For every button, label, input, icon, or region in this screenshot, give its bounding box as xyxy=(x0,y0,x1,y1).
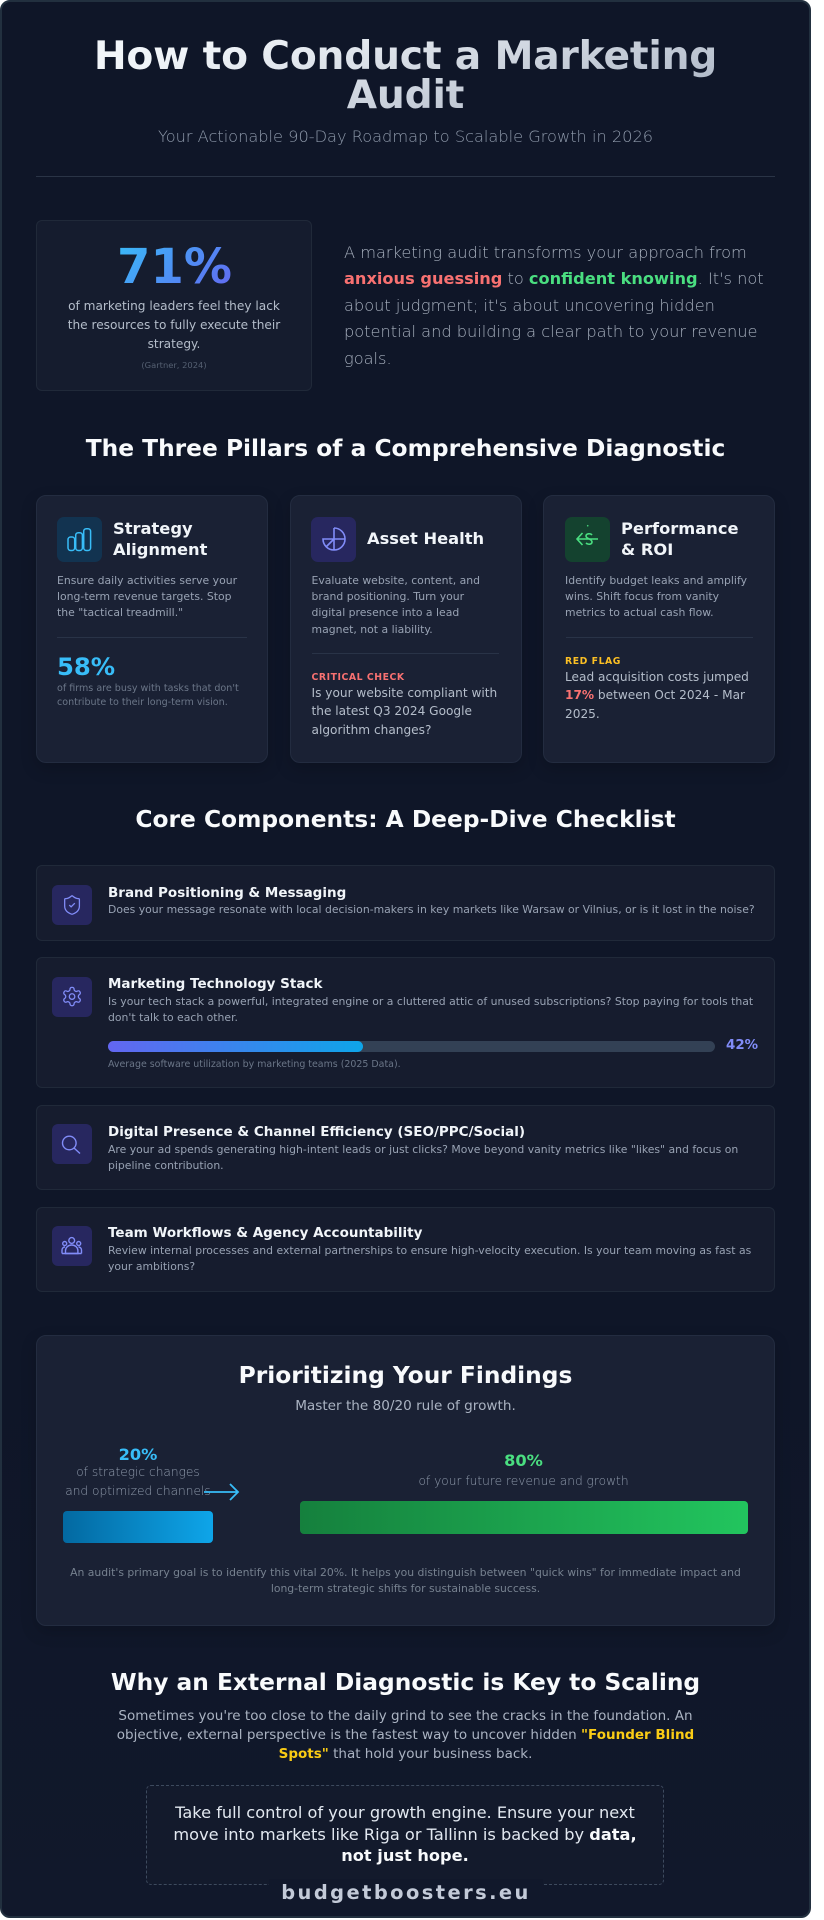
stat source: (Gartner, 2024) xyxy=(141,360,207,370)
item title: Brand Positioning & Messaging xyxy=(108,884,346,900)
panel: brand positioning xyxy=(36,865,775,941)
item title: Team Workflows & Agency Accountability xyxy=(108,1225,422,1241)
label: of your future revenue and growth xyxy=(418,1474,629,1488)
item text: pipeline contribution. xyxy=(108,1159,224,1172)
heading: three pillars: The Three Pillars of a Comprehensive Diagnostic xyxy=(86,434,725,462)
paragraph xyxy=(117,1708,694,1762)
item text xyxy=(108,1244,751,1273)
paragraph: objective, external perspective is the fastest way to uncover hidden "Founder Blind xyxy=(117,1726,694,1742)
intro paragraph: potential and building a clear path to your revenue xyxy=(344,322,757,341)
panel: prioritizing findings xyxy=(36,1334,775,1626)
red flag label: RED FLAG xyxy=(565,656,621,667)
callout text xyxy=(173,1803,637,1865)
label xyxy=(65,1465,211,1498)
pillar text: Ensure daily activities serve your xyxy=(57,574,237,587)
label: and optimized channels xyxy=(65,1484,211,1498)
icon: shield xyxy=(52,885,92,925)
red flag text: 17% between Oct 2024 - Mar xyxy=(565,688,745,702)
subtitle: Your Actionable 90-Day Roadmap to Scalable Growth in 2026 xyxy=(158,127,653,146)
panel: strategy alignment xyxy=(36,495,268,763)
label: of strategic changes xyxy=(76,1465,200,1479)
value 20%: 20% xyxy=(119,1445,157,1464)
panel note: An audit's primary goal is to identify this vital 20%. It helps you distinguish between "quick wins" for immediate impact and xyxy=(70,1566,741,1579)
panel: stat 71% xyxy=(36,220,312,391)
pillar title: Alignment xyxy=(113,540,207,559)
callout text: Take full control of your growth engine. Ensure your next xyxy=(175,1803,635,1822)
progress fill xyxy=(108,1041,363,1052)
item text: your ambitions? xyxy=(108,1260,195,1273)
pillar text: magnet, not a liability. xyxy=(312,623,433,636)
item text xyxy=(108,1143,738,1172)
callout text: move into markets like Riga or Tallinn is backed by data, xyxy=(173,1825,637,1844)
pillar title: Performance xyxy=(621,518,739,538)
panel: team workflows xyxy=(36,1207,775,1292)
pillar title xyxy=(113,518,208,559)
callout text: not just hope. xyxy=(341,1846,469,1865)
critical check text xyxy=(312,686,497,737)
bar 80% xyxy=(300,1501,748,1534)
progress caption: Average software utilization by marketing teams (2025 Data). xyxy=(108,1059,401,1070)
panel note xyxy=(70,1566,741,1595)
icon: gear xyxy=(52,977,92,1017)
progress value: 42% xyxy=(726,1038,758,1053)
pillar text: long-term revenue targets. Stop xyxy=(57,590,232,603)
item text: don't talk to each other. xyxy=(108,1011,238,1024)
panel: martech stack xyxy=(36,957,775,1088)
progress bar 42% xyxy=(108,1041,715,1052)
intro paragraph xyxy=(344,243,764,368)
intro paragraph: about judgment; it's about uncovering hidden xyxy=(344,296,715,315)
footer brand xyxy=(269,1879,543,1909)
icon: team xyxy=(52,1226,92,1266)
heading: core components: Core Components: A Deep-Dive Checklist xyxy=(135,805,676,833)
item text: Are your ad spends generating high-intent leads or just clicks? Move beyond vanity metrics like "likes" and focus on xyxy=(108,1143,738,1156)
panel heading: Prioritizing Your Findings xyxy=(239,1361,572,1389)
critical check text: Is your website compliant with xyxy=(312,686,497,700)
panel: performance and ROI xyxy=(543,495,775,763)
critical check text: the latest Q3 2024 Google xyxy=(312,704,472,718)
pillar text xyxy=(312,574,480,636)
paragraph: Sometimes you're too close to the daily grind to see the cracks in the foundation. An xyxy=(118,1708,693,1724)
stat description: strategy. xyxy=(148,337,200,351)
footer brand: budgetboosters.eu xyxy=(281,1881,531,1904)
critical check text: algorithm changes? xyxy=(312,723,431,737)
stat description: the resources to fully execute their xyxy=(68,318,280,332)
stat description xyxy=(68,298,280,351)
panel: digital presence xyxy=(36,1105,775,1190)
item text: Is your tech stack a powerful, integrated engine or a cluttered attic of unused subscriptions? Stop paying for tools that xyxy=(108,995,753,1008)
pillar title: & ROI xyxy=(621,540,673,559)
critical check label: CRITICAL CHECK xyxy=(312,672,405,682)
20 percent column xyxy=(63,1445,213,1543)
value 80%: 80% xyxy=(504,1451,543,1470)
red flag text: 2025. xyxy=(565,707,600,721)
item text xyxy=(108,995,753,1024)
stat note xyxy=(57,682,239,708)
title: How to Conduct a Marketing xyxy=(94,34,717,78)
pillar text xyxy=(57,574,238,619)
stat note: of firms are busy with tasks that don't xyxy=(57,682,239,694)
icon: bar chart xyxy=(57,517,102,562)
pillar text: metrics to actual cash flow. xyxy=(565,606,714,619)
intro paragraph: goals. xyxy=(344,349,392,368)
icon: arrow dollar xyxy=(565,517,610,562)
stat description: of marketing leaders feel they lack xyxy=(68,298,280,312)
red flag text: Lead acquisition costs jumped xyxy=(565,670,749,684)
item title: Marketing Technology Stack xyxy=(108,976,322,992)
pillar text: Evaluate website, content, and xyxy=(312,574,480,587)
pillar title: Asset Health xyxy=(367,529,484,548)
pillar text xyxy=(565,574,747,619)
paragraph: Spots" that hold your business back. xyxy=(279,1746,532,1762)
icon: search xyxy=(52,1124,92,1164)
pillar text: wins. Shift focus from vanity xyxy=(565,590,719,603)
callout xyxy=(146,1785,664,1884)
panel note: long-term strategic shifts for sustainable success. xyxy=(271,1582,540,1595)
item text: Review internal processes and external partnerships to ensure high-velocity execution. Is your team moving as fast as xyxy=(108,1244,751,1257)
panel: asset health xyxy=(290,495,522,763)
intro paragraph: A marketing audit transforms your approach from xyxy=(344,243,747,262)
pillar title xyxy=(621,518,739,559)
stat 58%: 58% xyxy=(57,652,115,681)
bar 20% xyxy=(63,1511,212,1543)
pillar text: digital presence into a lead xyxy=(312,606,459,619)
pillar text: brand positioning. Turn your xyxy=(312,590,464,603)
item text: Does your message resonate with local decision-makers in key markets like Warsaw or Vilnius, or is it lost in the noise? xyxy=(108,903,755,916)
pillar text: the "tactical treadmill." xyxy=(57,606,183,619)
panel subheading: Master the 80/20 rule of growth. xyxy=(295,1398,516,1414)
intro paragraph: anxious guessing to confident knowing. It's not xyxy=(344,269,764,288)
pillar text: Identify budget leaks and amplify xyxy=(565,574,747,587)
title: Audit xyxy=(347,73,464,118)
stat number: 71% xyxy=(117,239,232,295)
pillar title: Strategy xyxy=(113,518,193,538)
item title: Digital Presence & Channel Efficiency (SEO/PPC/Social) xyxy=(108,1124,525,1140)
stat note: contribute to their long-term vision. xyxy=(57,696,228,708)
80 percent column xyxy=(300,1451,748,1534)
icon: pie xyxy=(311,517,356,562)
arrow xyxy=(204,1483,240,1501)
title xyxy=(93,36,718,116)
red flag text xyxy=(565,670,749,721)
heading: external diagnostic: Why an External Diagnostic is Key to Scaling xyxy=(111,1668,700,1696)
